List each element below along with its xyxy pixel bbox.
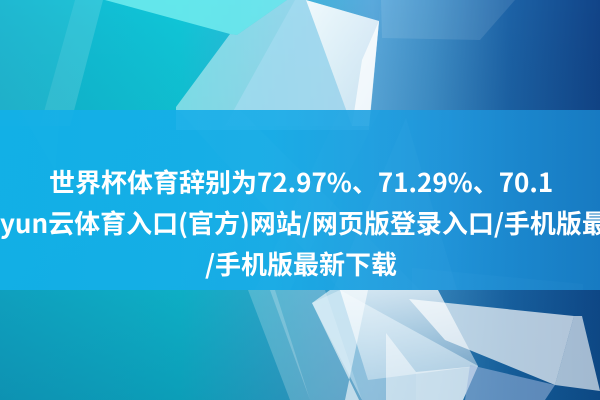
title band <box>0 110 600 290</box>
title text <box>0 163 600 282</box>
title text: yun云体育入口(官方)网站/网页版登录入口/手机版最 <box>0 204 600 241</box>
title text: /手机版最新下载 <box>205 245 397 282</box>
title text: 世界杯体育辞别为72.97%、71.29%、70.1 <box>49 163 553 200</box>
